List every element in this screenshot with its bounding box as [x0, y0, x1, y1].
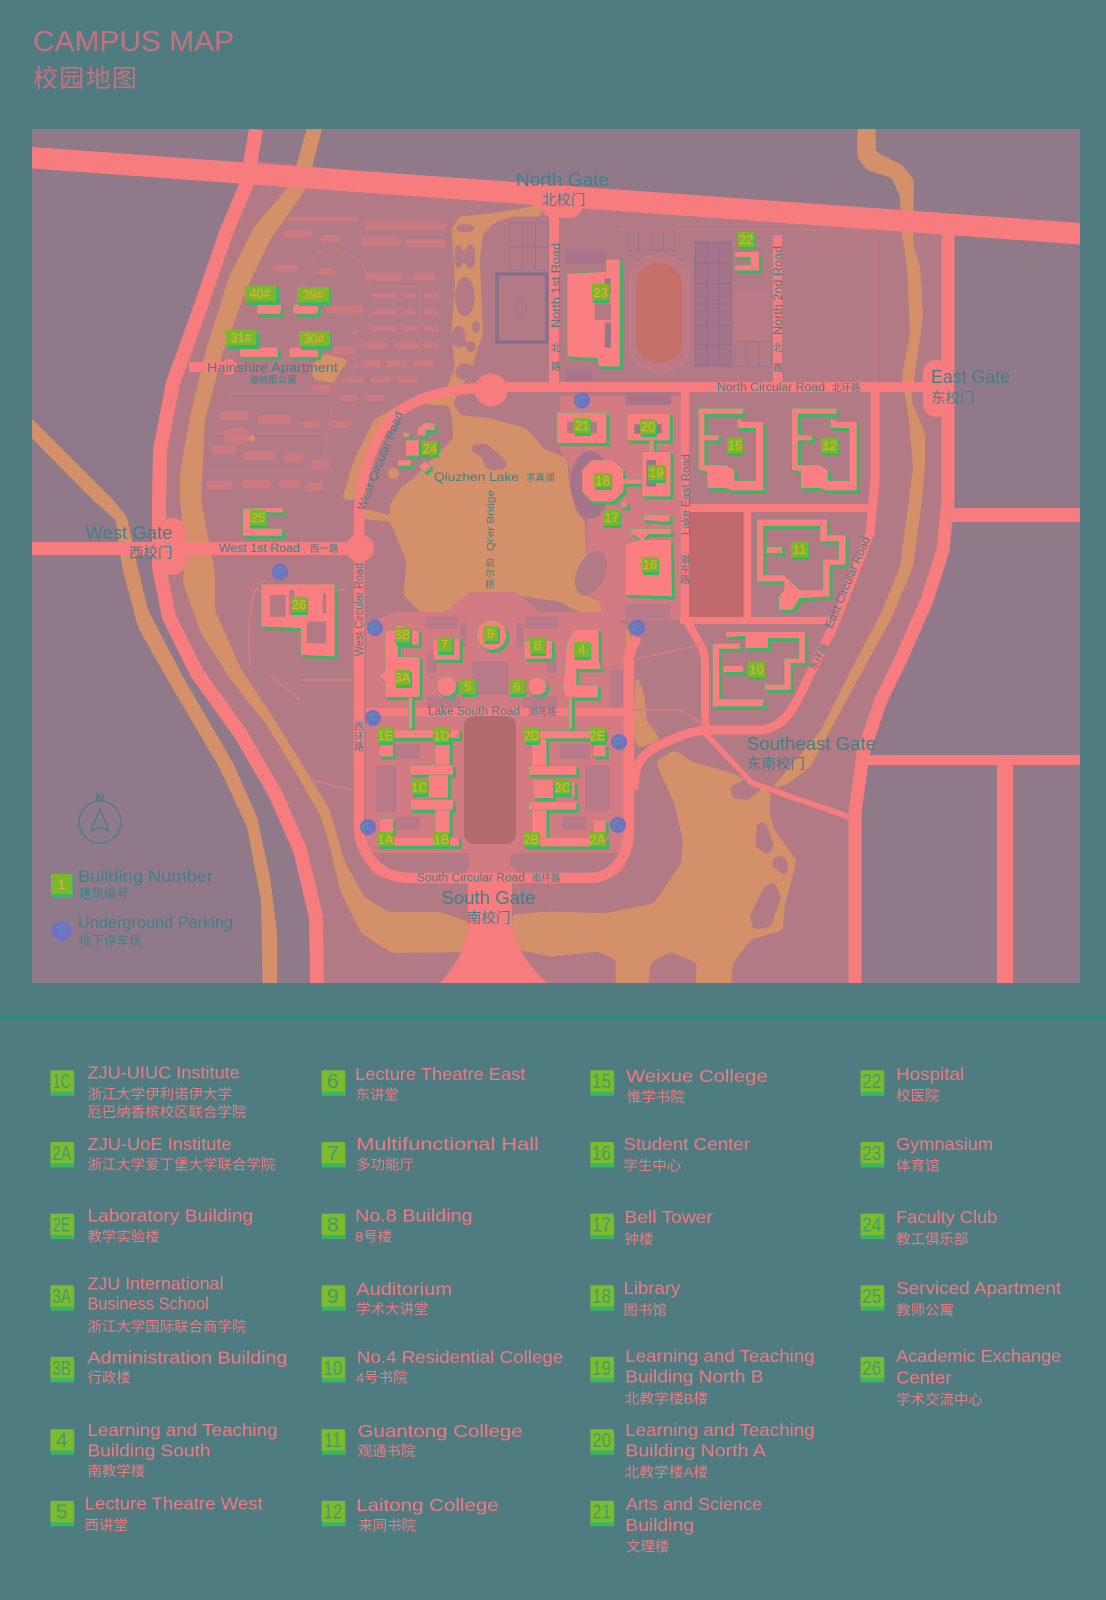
buildings: east campus — [557, 252, 857, 508]
entry 18 — [590, 1278, 681, 1319]
entry 12: 12 — [323, 1501, 342, 1524]
north channel — [248, 203, 541, 500]
entry 7: 7 — [327, 1142, 339, 1165]
road and place names — [207, 243, 873, 884]
building number tags: 2A — [590, 832, 606, 847]
entry 3A: 浙江大学国际联合商学院 — [87, 1319, 246, 1335]
entry 4: 南教学楼 — [87, 1463, 145, 1480]
central stadium — [464, 716, 516, 844]
building 3A and 3B — [379, 625, 420, 697]
road and place names: North 1st Road — [551, 243, 563, 328]
buildings: west — [243, 507, 335, 657]
building number tags: 1A — [378, 832, 394, 847]
building number tags: 10 — [749, 662, 764, 677]
building number tags: 25 — [251, 510, 265, 525]
entry 22: Hospital — [896, 1064, 964, 1084]
entry 20 — [590, 1420, 815, 1481]
river east — [770, 110, 925, 790]
entry 9 — [322, 1279, 452, 1318]
title: CAMPUS MAP — [33, 26, 234, 58]
entry 19: 北教学楼B楼 — [625, 1390, 708, 1407]
building number tags: 1D — [433, 728, 450, 743]
entry 15 — [590, 1066, 768, 1106]
entry 2A — [50, 1134, 275, 1173]
road and place names: West Circular Road — [356, 410, 406, 512]
entry 10: 10 — [323, 1357, 342, 1380]
entry 3B: 行政楼 — [87, 1370, 131, 1387]
entry 26: 26 — [862, 1357, 881, 1380]
entry 9: 学术大讲堂 — [356, 1301, 428, 1318]
entry 16: Student Center — [624, 1134, 750, 1154]
road and place names: 海纳郡公寓 — [249, 374, 297, 386]
gate labels: South Gate — [442, 888, 536, 908]
entry 3A: 3A — [52, 1285, 71, 1308]
entry 25 — [861, 1278, 1061, 1319]
building number tags: 5 — [464, 679, 472, 694]
building number tags: 22 — [739, 232, 753, 247]
entry 26 — [861, 1346, 1061, 1408]
entry 6 — [322, 1064, 526, 1104]
road and place names: Lake South Road — [428, 706, 520, 718]
entry 20: Learning and Teaching — [625, 1420, 815, 1440]
entry 25: 25 — [862, 1285, 881, 1308]
entry 17: 钟楼 — [625, 1231, 654, 1248]
sports fields — [464, 223, 875, 844]
entry 8: 8号楼 — [355, 1229, 392, 1245]
road and place names: 桥 — [485, 579, 495, 591]
entry 3B: 3B — [52, 1357, 71, 1380]
athletics track — [620, 230, 875, 387]
entry 6: 6 — [327, 1070, 339, 1093]
building number tags: 3B — [395, 627, 410, 642]
legend: underground parking — [52, 913, 233, 948]
road and place names: Qiuzhen Lake — [434, 470, 519, 484]
compass: N — [96, 791, 104, 805]
entry 3B — [50, 1348, 287, 1387]
road and place names: 北环路 — [832, 382, 861, 394]
entry 24: 教工俱乐部 — [896, 1231, 968, 1248]
building number tags: 2B — [524, 832, 539, 847]
road and place names: 尔 — [485, 568, 495, 580]
building 15 — [698, 408, 764, 491]
building number tags: 8 — [534, 638, 541, 653]
building number tags: 11 — [793, 542, 806, 557]
gate labels: West Gate — [86, 523, 172, 543]
title: 校园地图 — [33, 65, 138, 93]
road and place names: 路 — [773, 362, 783, 374]
north circular road — [490, 382, 935, 392]
entry 17: 17 — [592, 1214, 611, 1236]
gate labels: Southeast Gate — [747, 734, 876, 754]
gate labels: 东校门 — [931, 390, 974, 407]
entry 19: 19 — [592, 1357, 611, 1380]
entry 15: 惟学书院 — [627, 1089, 685, 1106]
road and place names: 路 — [680, 574, 690, 586]
entry 23 — [861, 1134, 993, 1174]
legend — [51, 867, 233, 948]
building number tags: 2D — [523, 728, 540, 743]
entry 6: Lecture Theatre East — [355, 1064, 526, 1084]
building 21 — [557, 412, 607, 443]
gate labels: 南校门 — [467, 910, 510, 927]
road and place names: Qi'er Bridge — [485, 490, 497, 551]
entry 3A: ZJU International — [87, 1274, 224, 1293]
entry 10: 4号书院 — [356, 1370, 408, 1387]
Qiuzhen Lake — [363, 397, 602, 617]
road and place names: 西一路 — [310, 543, 339, 555]
entry 21: Building — [625, 1515, 694, 1535]
entry 9: 9 — [327, 1285, 339, 1308]
section divider — [0, 1016, 1106, 1020]
entry 25: 教师公寓 — [896, 1301, 954, 1319]
building 1 west wing — [379, 729, 459, 846]
entry 7: Multifunctional Hall — [356, 1134, 539, 1154]
entry 3A — [50, 1274, 246, 1335]
building number tags: 2E — [590, 728, 606, 743]
water bodies — [15, 110, 925, 1000]
underground parking markers: P4 — [612, 821, 623, 833]
entry 12 — [322, 1495, 499, 1534]
road and place names: 东环路 — [807, 641, 831, 672]
building number tags: 4 — [578, 642, 586, 657]
road and place names: East Circular Road — [824, 535, 873, 630]
lake islands — [451, 224, 788, 930]
underground parking markers: P5 — [362, 823, 373, 835]
buildings: south campus — [379, 620, 607, 847]
building directory: right columns — [590, 1064, 1061, 1555]
entry 20: 北教学楼A楼 — [625, 1464, 708, 1481]
entry 3B: Administration Building — [87, 1348, 287, 1368]
entry 4: 4 — [56, 1429, 68, 1452]
building number tags: 16 — [643, 557, 657, 572]
entry 1C: ZJU-UIUC Institute — [87, 1063, 240, 1083]
entry 2A: 浙江大学爱丁堡大学联合学院 — [87, 1157, 275, 1173]
entry 26: Academic Exchange — [896, 1346, 1061, 1366]
entry 5: 西讲堂 — [85, 1517, 128, 1534]
entry 16: 16 — [592, 1142, 611, 1165]
entry 4: Learning and Teaching — [87, 1420, 278, 1440]
entry 1C: 1C — [53, 1070, 71, 1093]
upper campus plaza — [560, 396, 685, 620]
building number tags: 9 — [487, 626, 494, 641]
entry 1C: 厄巴纳香槟校区联合学院 — [87, 1104, 246, 1121]
building number tags: 1B — [434, 832, 449, 847]
Hainshire highlighted blocks — [240, 304, 318, 357]
entry 2E: 教学实验楼 — [87, 1229, 160, 1245]
entry 18: 18 — [592, 1285, 611, 1308]
entry 8 — [322, 1206, 473, 1245]
building number tags: 30# — [304, 332, 324, 346]
entry 15: Weixue College — [626, 1066, 768, 1086]
road and place names: 东 — [680, 564, 690, 576]
gate labels: 东南校门 — [747, 756, 805, 773]
entry 2E: Laboratory Building — [87, 1206, 253, 1225]
building number tags: 31# — [231, 331, 251, 345]
entry 19: Building North B — [625, 1367, 764, 1387]
road and place names: Lake East Road — [681, 454, 693, 535]
building number tags — [226, 232, 839, 849]
east gate blob — [923, 360, 942, 417]
entry 18: Library — [624, 1278, 681, 1298]
building 8 — [524, 641, 552, 659]
road and place names: Hainshire Apartment — [207, 361, 339, 375]
road and place names: 北 — [773, 343, 783, 354]
building 24 — [398, 423, 435, 473]
entry 25: Serviced Apartment — [896, 1278, 1061, 1298]
building 11 — [757, 519, 846, 610]
legend: underground parking: P — [58, 928, 65, 940]
building number tags: 39# — [303, 288, 323, 302]
entry 4 — [50, 1420, 278, 1480]
campus ground — [159, 160, 948, 983]
underground parking markers: P1 — [576, 397, 587, 409]
underground parking markers: P2 — [631, 624, 642, 636]
entry 11: Guantong College — [358, 1421, 523, 1441]
entry 1C: 浙江大学伊利诺伊大学 — [87, 1086, 232, 1103]
building 2 east wing — [523, 731, 607, 847]
building number tags: 1E — [378, 728, 394, 743]
road and place names: 路 — [354, 741, 364, 753]
entry 8: 8 — [327, 1214, 339, 1236]
gate labels: 北校门 — [542, 192, 586, 209]
road and place names: 路 — [551, 361, 561, 373]
entry 10: No.4 Residential College — [357, 1347, 563, 1367]
entry 22: 校医院 — [896, 1087, 940, 1104]
title — [33, 26, 234, 93]
road and place names: 环 — [354, 732, 364, 743]
building number tags: 19 — [649, 465, 664, 480]
entry 17 — [590, 1207, 713, 1248]
entry 2A: ZJU-UoE Institute — [87, 1134, 232, 1154]
legend: underground parking: 地下停车场 — [79, 933, 142, 948]
south campus plaza — [366, 250, 671, 878]
gate labels: North Gate — [516, 170, 609, 190]
building 10 — [712, 632, 805, 707]
entry 6: 东讲堂 — [356, 1087, 399, 1104]
entry 8: No.8 Building — [355, 1206, 473, 1225]
underground parking markers — [272, 392, 645, 835]
map labels — [86, 170, 1010, 927]
road and place names: South Circular Road — [417, 872, 525, 884]
river west — [180, 110, 472, 953]
entry 5: 5 — [56, 1501, 68, 1524]
legend: underground parking: Underground Parking — [78, 913, 233, 932]
road and place names: West Circular Road — [354, 563, 366, 656]
entry 2E: 2E — [53, 1214, 71, 1236]
west gate blob — [166, 518, 185, 575]
underground parking markers: P8 — [274, 568, 285, 580]
legend: building number: 1 — [58, 876, 66, 892]
south east lake — [513, 750, 797, 997]
road and place names: 启 — [485, 557, 495, 569]
road and place names: North 2nd Road — [773, 246, 785, 335]
legend: building number — [51, 867, 213, 901]
entry 16 — [590, 1134, 750, 1174]
compass — [79, 791, 121, 843]
entry 11: 观通书院 — [358, 1443, 415, 1460]
entry 3A: Business School — [87, 1294, 209, 1314]
entry 5 — [50, 1494, 263, 1534]
building 25 — [243, 507, 283, 536]
entry 4: Building South — [87, 1441, 211, 1461]
entry 7 — [322, 1134, 539, 1173]
entry 21: 文理楼 — [626, 1539, 669, 1555]
entry 24 — [861, 1207, 997, 1248]
building number tags: 26 — [292, 597, 306, 612]
gate labels: East Gate — [931, 367, 1010, 387]
road and place names: 湖南路 — [528, 706, 557, 718]
building number tags: 12 — [822, 438, 837, 453]
road and place names: 南环路 — [532, 872, 561, 884]
building 12 — [792, 408, 857, 491]
underground parking markers: P7 — [369, 624, 380, 636]
entry 17: Bell Tower — [625, 1207, 713, 1227]
small ponds — [626, 628, 658, 747]
diagonal water west — [32, 419, 277, 983]
north gate blob — [541, 186, 583, 218]
entry 21: Arts and Science — [626, 1494, 762, 1514]
road and place names: 求真湖 — [526, 472, 555, 484]
entry 23: 23 — [862, 1142, 881, 1165]
building number tags: 21 — [575, 418, 589, 433]
building number tags: 6 — [513, 679, 521, 694]
roads — [32, 129, 1080, 983]
entry 23: Gymnasium — [896, 1134, 993, 1154]
road and place names: 湖 — [680, 555, 690, 566]
entry 20: Building North A — [625, 1441, 767, 1461]
underground parking markers: P3 — [613, 738, 624, 750]
entry 19 — [590, 1346, 815, 1407]
road and place names: North Circular Road — [717, 382, 825, 394]
entry 16: 学生中心 — [624, 1158, 681, 1174]
road and place names: 西 — [354, 722, 364, 733]
building number tags: 18 — [595, 473, 610, 488]
Hainshire residential blocks — [206, 217, 446, 492]
building number tags: 1C — [411, 780, 428, 795]
building 22 — [735, 252, 759, 271]
entry 18: 图书馆 — [624, 1302, 667, 1319]
building number tags: 2C — [554, 780, 571, 795]
legend: building number: 建筑编号 — [79, 886, 129, 901]
entry 2E — [50, 1206, 253, 1245]
road and place names: 北 — [551, 343, 561, 354]
entry 12: 来同书院 — [358, 1518, 416, 1534]
entry 23: 体育馆 — [896, 1158, 940, 1174]
building directory: left columns — [50, 1063, 563, 1534]
entry 21 — [590, 1494, 762, 1555]
building number tags: 24 — [423, 441, 437, 456]
underground parking markers: P6 — [367, 714, 378, 726]
entry 11: 11 — [324, 1429, 342, 1452]
building 26 — [261, 584, 335, 657]
entry 26: 学术交流中心 — [896, 1391, 983, 1408]
campus map panel — [15, 110, 1080, 1000]
entry 1C — [50, 1063, 246, 1121]
entry 22 — [861, 1064, 964, 1104]
entry 10 — [322, 1347, 563, 1387]
entry 21: 21 — [592, 1501, 611, 1524]
building number tags: 17 — [604, 510, 619, 525]
building number tags: 3A — [395, 670, 411, 685]
road and place names: West 1st Road — [219, 543, 300, 555]
building 16 — [625, 514, 672, 597]
entry 12: Laitong College — [356, 1495, 499, 1515]
entry 2A: 2A — [52, 1142, 71, 1165]
entry 19: Learning and Teaching — [625, 1346, 815, 1366]
entry 24: Faculty Club — [896, 1207, 997, 1227]
building 7 — [433, 638, 460, 660]
entry 7: 多功能厅 — [356, 1157, 414, 1173]
entry 22: 22 — [862, 1070, 881, 1093]
building number tags: 23 — [593, 285, 608, 300]
gate labels: 西校门 — [129, 545, 172, 562]
entry 5: Lecture Theatre West — [85, 1494, 263, 1513]
buildings 5 and 6 — [437, 676, 457, 696]
field by lake east road — [689, 512, 743, 617]
entry 15: 15 — [592, 1070, 611, 1093]
gate labels — [86, 170, 1010, 927]
building number tags: 40# — [250, 287, 270, 301]
building number tags: 7 — [441, 637, 448, 652]
building 4 — [563, 629, 602, 698]
building 9 — [477, 620, 507, 650]
building 23 — [567, 259, 620, 367]
building number tags: 20 — [641, 419, 655, 434]
entry 26: Center — [896, 1368, 952, 1387]
south gate road and fan — [440, 875, 547, 983]
entry 20: 20 — [592, 1429, 611, 1452]
entry 11 — [322, 1421, 523, 1460]
entry 24: 24 — [862, 1214, 882, 1236]
entry 9: Auditorium — [356, 1279, 452, 1299]
buildings 20, 19, 18, 17 — [582, 413, 671, 508]
legend: building number: Building Number — [78, 867, 213, 886]
building number tags: 15 — [728, 438, 742, 453]
